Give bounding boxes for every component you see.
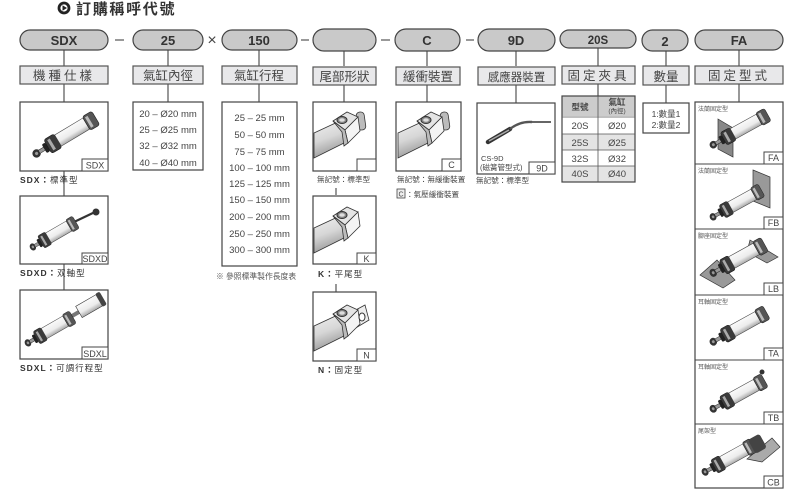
heading: mounting type: 固定型式 [708,68,770,83]
caption: K: K：平尾型 [318,269,363,279]
panel: SDXD: SDXD [82,254,108,264]
note: stroke: ※ 參照標準製作長度表 [216,271,296,281]
icon: sensor [488,122,551,142]
panel: bore list: 20 – Ø20 mm [139,109,197,120]
code separators: × [207,32,217,49]
caption: SDX: SDX：標準型 [20,175,78,185]
caption: N: N：固定型 [318,365,363,375]
connector lines [64,48,739,292]
option: TB: 耳軸固定型 [698,363,728,371]
panel: bore list [133,102,203,170]
option: TA [698,298,783,360]
column: tail shape [313,29,376,375]
panel: SDX: SDX [86,160,104,170]
caption: sensor: 無記號：標準型 [476,175,530,185]
table: clamp sizes: Ø25 [608,138,626,149]
heading: sensor: 感應器裝置 [488,70,545,84]
option: TB [698,363,783,424]
caption: SDXL: SDXL：可調行程型 [20,363,104,373]
code pill: 25: 25 [161,33,175,48]
table: clamp sizes: 32S [572,154,588,165]
panel: sensor: 9D [536,164,548,174]
panel: no mark tail [313,102,376,171]
heading: model spec [20,66,108,84]
panel: quantity: 2:數量2 [652,120,681,130]
panel: sensor: (磁簧管型式) [480,162,523,172]
panel: stroke list: 250 – 250 mm [229,229,290,240]
option: LB: 腳座固定型 [698,232,728,240]
panel: N [313,292,376,361]
option: FB: 法蘭固定型 [698,167,728,175]
table: clamp sizes: 20S [572,121,588,132]
panel: sensor [477,103,555,174]
table: clamp sizes [562,96,635,182]
panel: stroke list: 300 – 300 mm [229,245,290,256]
heading: model spec: 機種仕樣 [33,68,95,83]
column: mounting clamp [560,30,636,182]
code pill: C: C [422,33,432,48]
heading: stroke: 氣缸行程 [234,68,284,83]
option: CB [698,427,783,488]
heading: quantity: 數量 [653,70,679,84]
panel: stroke list: 75 – 75 mm [234,147,285,158]
panel: SDXD [20,196,108,264]
column: bore [133,30,203,170]
panel: K [313,196,376,264]
option: TA: 耳軸固定型 [698,298,728,306]
heading: clamp: 固定夾具 [567,68,630,83]
code pill: 9D: 9D [508,33,524,48]
caption: no mark tail: 無記號：標準型 [317,174,371,184]
panel: SDXL [20,290,108,359]
option: LB: LB [768,284,779,294]
panel: stroke list: 125 – 125 mm [229,179,290,190]
caption: air cushion: C [398,192,404,198]
code pill: 20S: 20S [588,35,609,47]
heading: bore: 氣缸內徑 [143,68,193,83]
panel: SDXL: SDXL [83,349,107,359]
panel: bore list: 25 – Ø25 mm [139,125,197,136]
option: FB [698,167,783,229]
table: clamp sizes: 氣缸 [608,97,626,107]
panel: bore list: 32 – Ø32 mm [139,141,197,152]
column: stroke [216,30,297,281]
code pill: SDX [20,30,108,50]
caption: cushion none: 無記號：無緩衝裝置 [397,174,466,184]
code pill: C [395,29,460,51]
panel: cushion: C [448,160,455,170]
panel: K: K [363,254,370,264]
code pill: 20S [560,30,636,48]
option: FA [698,105,783,164]
table: clamp sizes: 25S [572,138,588,149]
code pill: FA [695,30,783,50]
table: clamp sizes: (內徑) [608,106,626,115]
code pill: 9D [478,29,555,51]
column: sensor [476,29,555,185]
code pill: 150: 150 [248,33,270,48]
panel: quantity: 1:數量1 [652,109,681,119]
panel: stroke list: 50 – 50 mm [234,130,285,141]
heading: mounting type [695,66,783,84]
heading: clamp [562,66,635,84]
heading: stroke [222,66,297,84]
table: clamp sizes: Ø32 [608,154,626,165]
table: clamp sizes: 型號 [571,102,589,112]
panel: bore list: 40 – Ø40 mm [139,158,197,169]
panel: quantity [643,103,689,133]
panel: mounting stack [695,102,783,488]
panel: stroke list: 200 – 200 mm [229,212,290,223]
table: clamp sizes: Ø40 [608,169,626,180]
panel: stroke list: 150 – 150 mm [229,195,290,206]
code pill: blank [313,29,376,51]
heading: cushion [396,67,460,85]
column: model spec [20,30,108,373]
heading: tail shape [313,67,376,85]
panel: stroke list [222,102,297,266]
code pill: 150 [222,30,297,50]
option: TA: TA [768,348,779,358]
column: quantity [642,30,689,133]
caption: SDXD: SDXD：双軸型 [20,268,86,278]
option: CB: CB [767,478,780,488]
option: FA: FA [768,153,779,163]
option: FA: 法蘭固定型 [698,105,728,113]
heading: tail shape: 尾部形狀 [319,69,370,84]
table: clamp sizes: Ø20 [608,121,626,132]
option: LB [698,232,783,295]
panel: cushion [396,102,461,171]
panel: stroke list: 100 – 100 mm [229,163,290,174]
title: 訂購稱呼代號 [76,0,176,18]
caption: air cushion: ：氣壓緩衝裝置 [406,189,460,199]
column: mounting type [695,30,783,488]
panel: N: N [363,350,370,360]
option: CB: 尾架型 [698,427,716,435]
heading: cushion: 緩衝裝置 [403,69,453,84]
option: FB: FB [768,218,779,228]
code pill: 2: 2 [661,34,669,49]
table: clamp sizes: 40S [572,169,588,180]
code pill: SDX: SDX [51,33,78,48]
panel: sensor: CS-9D [481,154,504,163]
option: TB: TB [768,413,779,423]
panel: SDX [20,102,108,171]
code pill: FA: FA [731,33,748,48]
panel: stroke list: 25 – 25 mm [234,113,285,124]
heading: sensor [478,67,555,85]
column: cushion [395,29,466,199]
